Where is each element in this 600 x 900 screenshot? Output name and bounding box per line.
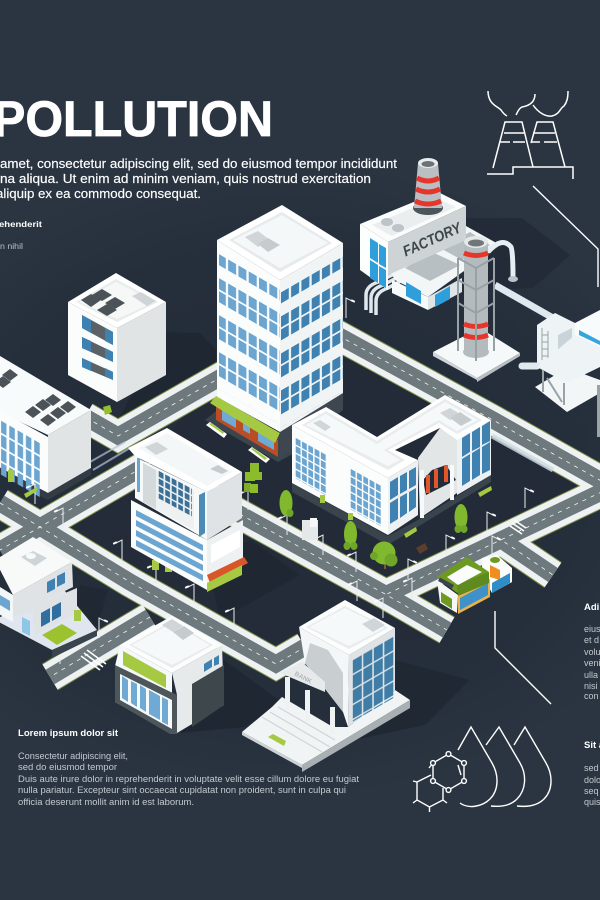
upper roof (128, 428, 242, 492)
right text block: Adi: Adi (584, 602, 599, 613)
wing face with tall windows (388, 460, 418, 535)
shop sign (438, 577, 454, 589)
solar building left edge (0, 356, 91, 500)
intro paragraph: amet, consectetur adipiscing elit, sed do eiusmod tempor incididunt (0, 157, 398, 171)
roof unit (21, 551, 47, 566)
bottom-left text block: Consectetur adipiscing elit, (18, 751, 128, 761)
callout line: lower (495, 611, 551, 704)
city ground blocks (0, 160, 600, 800)
columns and pediment: BANK (293, 671, 313, 686)
small house bottom left (0, 537, 97, 658)
base shadow (292, 475, 491, 545)
plant base (535, 368, 600, 412)
parked bus (268, 734, 286, 746)
plant legs (543, 370, 564, 405)
cube tree (244, 463, 262, 493)
trees and bushes (8, 463, 492, 572)
factory pipes left (366, 272, 406, 315)
intro paragraph (0, 157, 398, 201)
columns and pediment (280, 662, 335, 735)
icon: oil drops and molecule (413, 727, 551, 812)
shop glass front (458, 579, 490, 614)
bottom-left text block: sed do eiusmod tempor (18, 762, 117, 772)
recess entrance (418, 428, 457, 518)
shop roof (120, 616, 222, 673)
bottom-left text block: Duis aute irure dolor in reprehenderit in voluptate velit esse cillum dolore eu fugiat (18, 774, 360, 784)
lawn (42, 624, 77, 645)
tower right face (280, 243, 343, 432)
top-left caption (0, 219, 42, 251)
L-shaped roof (292, 395, 491, 478)
molecule hexagons (413, 752, 466, 812)
lower volume (32, 588, 77, 635)
white base plate (433, 328, 520, 382)
plant box (522, 313, 575, 368)
cube bush (103, 405, 112, 415)
lower block (131, 500, 243, 590)
intro paragraph: na aliqua. Ut enim ad minim veniam, quis nostrud exercitation (0, 172, 371, 186)
shop left wall (437, 580, 458, 613)
scaffold (458, 258, 494, 361)
intro paragraph: aliquip ex ea commodo consequat. (0, 187, 201, 201)
bank tower right face (348, 628, 395, 727)
tower roof (217, 205, 343, 280)
process tower with scaffold (433, 236, 553, 382)
factory sign: FACTORY (400, 219, 466, 260)
planters and bins (8, 470, 492, 572)
orange awning (207, 557, 248, 583)
right text block: Adi: nisi (584, 681, 598, 691)
bank tower left side (299, 627, 349, 727)
factory chimney (413, 158, 443, 215)
curved pipe (488, 243, 513, 278)
door (22, 617, 30, 636)
title: POLLUTION (0, 91, 273, 147)
building with stripes centre-left (128, 428, 248, 592)
right text block: Sit: seq (584, 786, 599, 796)
L-shaped building (292, 395, 491, 545)
car wash shop (437, 555, 512, 614)
bank roof (299, 600, 395, 655)
cylinder (463, 236, 489, 358)
bank base and stairs (242, 690, 410, 772)
roof solar panels (0, 369, 76, 426)
top-left caption: n nihil (0, 241, 23, 251)
shop green roof frame (437, 557, 489, 593)
bank building (242, 600, 410, 772)
bottom-left text block (18, 728, 360, 807)
left long face (292, 425, 388, 535)
tower lower shop (205, 393, 343, 462)
tower left face (217, 240, 281, 432)
central tower (205, 205, 343, 463)
upper volume (13, 562, 73, 617)
green awning (210, 396, 280, 443)
bottom-left text block: nulla pariatur. Excepteur sint occaecat cupidatat non proident, sunt in culpa qui (18, 785, 346, 795)
icon: cooling towers with smoke (487, 91, 573, 179)
benches (206, 422, 270, 463)
right text block: Adi (584, 602, 600, 701)
right text block: Adi: ulla (584, 670, 598, 680)
crossings (81, 520, 526, 670)
road network (0, 331, 600, 677)
right treatment plant (522, 310, 600, 437)
right text block: Adi: con (584, 691, 599, 701)
right text block: Sit (584, 740, 600, 807)
top-left caption: ehenderit (0, 219, 42, 229)
left wall windows (1, 421, 42, 499)
solar building top left (68, 273, 166, 415)
shop left face (115, 645, 177, 734)
factory main block (360, 192, 466, 290)
green shop base (207, 565, 242, 592)
balconies (82, 315, 113, 380)
factory lower wing (388, 226, 500, 310)
factory building (360, 158, 500, 315)
shop right face (172, 645, 224, 733)
right text block: Sit: sed (584, 763, 599, 773)
planter (74, 610, 81, 621)
plant canopy (537, 335, 600, 383)
plaza (0, 585, 97, 650)
solar panels (81, 289, 125, 316)
right wing face (457, 420, 491, 495)
round trees (280, 490, 468, 569)
shop right volume (482, 555, 512, 593)
bottom-left text block: officia deserunt mollit anim id est laborum. (18, 797, 194, 807)
roof unit (132, 292, 156, 306)
upper block (135, 457, 242, 540)
plant rear block (575, 310, 600, 350)
right text block: Adi: et d (584, 635, 599, 645)
bottom-left text block: Lorem ipsum dolor sit (18, 728, 119, 739)
shop building bottom centre (115, 616, 224, 734)
street lamps (26, 298, 534, 664)
connecting duct (495, 285, 553, 318)
callout line: upper (533, 186, 598, 287)
